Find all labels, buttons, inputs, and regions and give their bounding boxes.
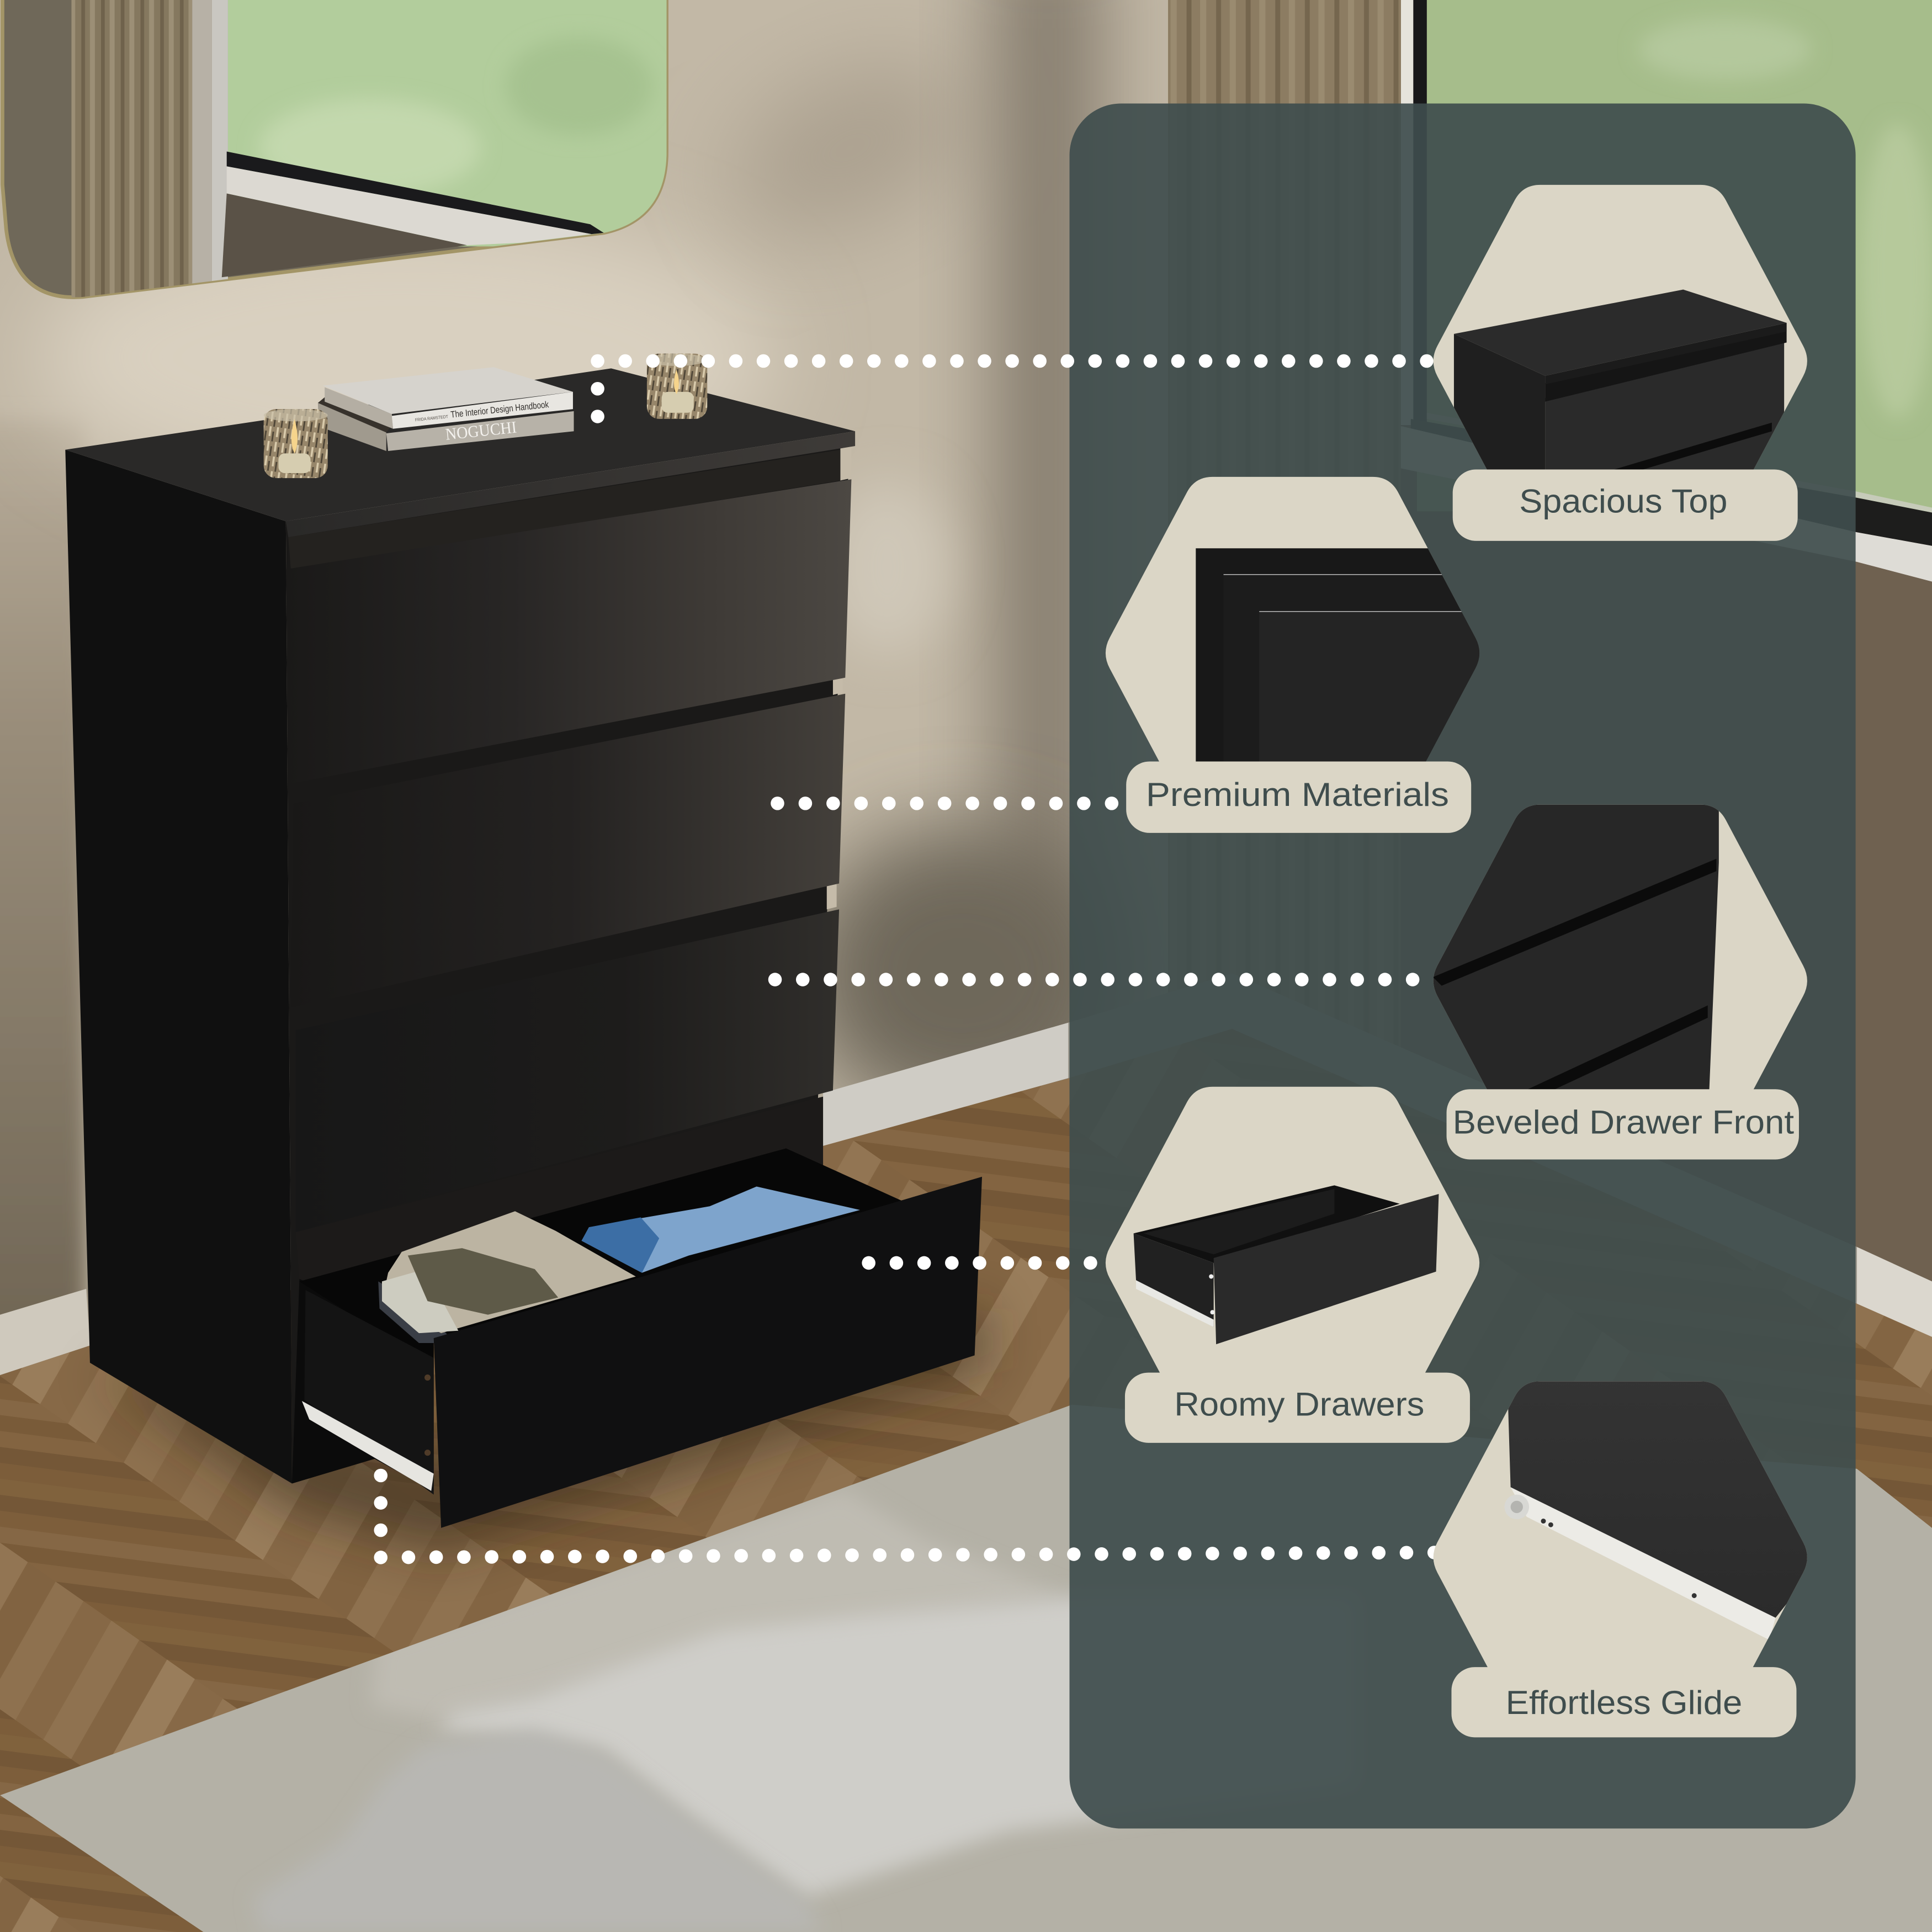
detail image — [1454, 290, 1787, 554]
label — [1453, 469, 1798, 541]
candle left — [264, 409, 328, 478]
rug light patch — [442, 1591, 1102, 1900]
background: baseboards — [0, 973, 1932, 1375]
callout: premium materials — [1106, 477, 1519, 845]
books — [318, 367, 574, 451]
hexagon — [1434, 185, 1807, 537]
callout: roomy drawers — [1106, 1087, 1479, 1443]
lower book: NOGUCHI — [444, 417, 518, 444]
label — [1126, 761, 1471, 833]
upper book — [323, 367, 573, 429]
candle right — [647, 354, 707, 419]
dresser front carcass — [286, 437, 850, 1484]
upper book: The Interior Design Handbook — [450, 399, 549, 420]
label — [1447, 1089, 1799, 1159]
label text: Effortless Glide — [1506, 1684, 1742, 1721]
label text: Roomy Drawers — [1174, 1386, 1424, 1423]
background: room wall — [0, 0, 1146, 1375]
callout: effortless glide — [1434, 1368, 1824, 1737]
dotted connector: effortless glide — [381, 1475, 1435, 1557]
hexagon — [1434, 805, 1807, 1157]
feature panel — [1070, 104, 1856, 1828]
detail image — [1196, 548, 1519, 845]
dotted connector: spacious top — [598, 361, 1427, 418]
open drawer bay — [296, 1097, 823, 1281]
label — [1125, 1373, 1470, 1443]
drawer slide rail — [302, 1401, 434, 1491]
background: floor shadow — [90, 1306, 986, 1552]
background: window with foliage — [1370, 0, 1932, 582]
dresser side panel — [65, 450, 292, 1483]
dresser top edge — [286, 431, 855, 537]
open drawer front — [434, 1177, 982, 1528]
background: rug — [0, 1405, 1932, 1932]
hexagon — [1106, 1087, 1479, 1439]
label text: Beveled Drawer Front — [1453, 1103, 1794, 1141]
background: right wall — [1232, 0, 1932, 1337]
screws — [424, 1374, 431, 1456]
lower book — [318, 397, 574, 451]
open drawer interior — [299, 1148, 903, 1368]
drawer backing — [292, 1279, 434, 1491]
dotted connector: beveled drawer front — [775, 976, 1413, 983]
folded clothes — [378, 1187, 860, 1343]
strip under top — [288, 450, 840, 569]
drawer 2 — [291, 694, 845, 1008]
mirror — [0, 0, 672, 302]
upper book: FRIDA RAMSTEDT — [415, 414, 449, 422]
hexagon — [1434, 1381, 1807, 1734]
callout: spacious top — [1434, 185, 1807, 554]
drawer 3 — [296, 909, 839, 1232]
dotted connector: premium materials — [777, 800, 1113, 806]
open drawer side — [304, 1290, 434, 1495]
detail image — [1417, 789, 1719, 1097]
wall notches — [827, 446, 851, 909]
label text: Premium Materials — [1146, 776, 1449, 813]
callout: beveled drawer front — [1417, 789, 1807, 1159]
dotted connector: roomy drawers — [869, 1260, 1092, 1266]
dresser — [65, 368, 982, 1528]
label — [1451, 1667, 1796, 1737]
background: curtains — [1168, 0, 1401, 1060]
dresser top surface — [65, 368, 855, 521]
background: herringbone floor — [0, 1000, 1932, 1932]
hexagon — [1106, 477, 1479, 829]
detail image — [1504, 1368, 1824, 1640]
label text: Spacious Top — [1519, 482, 1727, 520]
drawer 1 — [286, 479, 851, 784]
rug woven patch — [254, 1730, 823, 1932]
drawer image — [1134, 1185, 1439, 1344]
